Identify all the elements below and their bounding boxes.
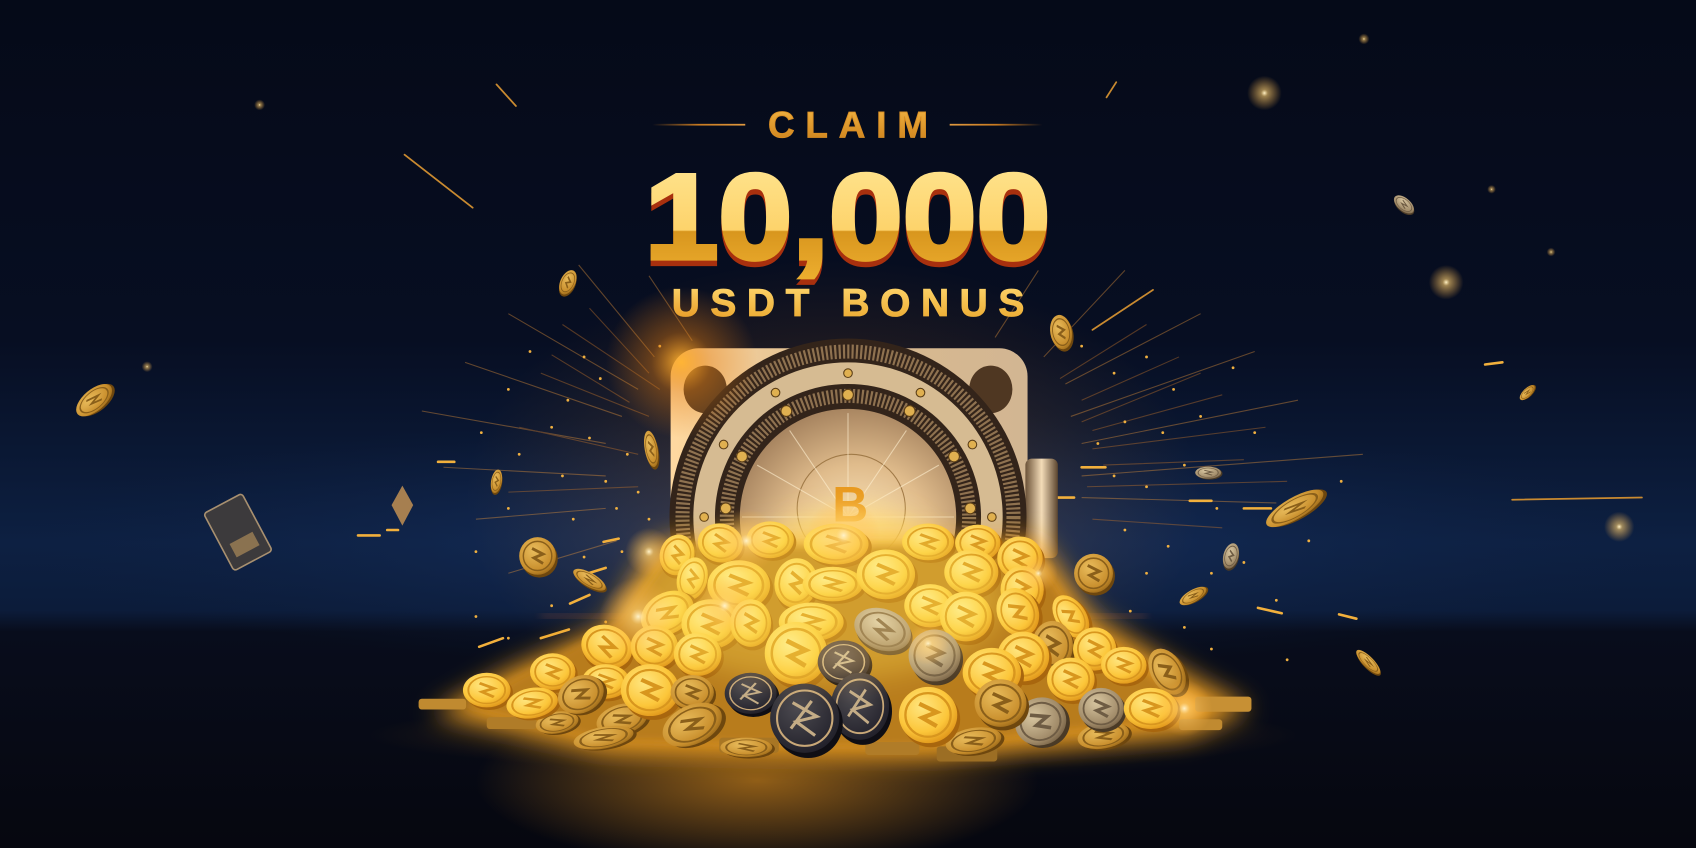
vault safe [606, 287, 1058, 695]
coin: right edge-on [1261, 481, 1332, 535]
scattered gold sparks [476, 346, 1341, 660]
coin: left tiny [489, 469, 504, 496]
coin: upper left [555, 267, 581, 299]
coin: right flat [1195, 467, 1222, 480]
safe top glow [606, 287, 757, 438]
coin: right small [1177, 582, 1211, 610]
back coins [530, 520, 1197, 705]
coin: far left [71, 377, 120, 424]
dial rivets [700, 369, 996, 521]
coin: far lower right [1352, 647, 1385, 679]
title: 10,000 amount: 10,000 [645, 154, 1050, 290]
light burst rays [422, 265, 1363, 573]
coin: near safe left [642, 430, 662, 471]
pile base fill [465, 546, 1179, 746]
pile light overlay [638, 519, 1006, 681]
title: 10,000 amount: 10,000 [645, 149, 1050, 285]
coin: far upper right [1390, 192, 1418, 219]
pile glow [433, 541, 1249, 757]
diamond token [392, 486, 413, 526]
flying coins and tokens [71, 192, 1538, 679]
dial glow [779, 508, 930, 584]
card token [204, 493, 272, 571]
streak accents [358, 82, 1642, 647]
title: claim: CLAIM [768, 104, 928, 145]
title: usdt bonus: USDT BONUS [672, 282, 1024, 325]
coin: lower left small [570, 565, 610, 597]
coin pile [419, 499, 1251, 761]
coin: upper right [1047, 313, 1076, 354]
bitcoin emblem: B [832, 476, 868, 532]
pile sparkles [599, 499, 1213, 737]
coin: lower left [519, 537, 558, 578]
safe body [671, 348, 1028, 619]
coin: right tall [1220, 541, 1242, 573]
coin: far right tiny [1517, 382, 1538, 403]
safe side handle [1025, 459, 1058, 558]
front coins [463, 664, 1181, 761]
distant stars [142, 34, 1634, 542]
safe corner knobs [684, 366, 1012, 413]
coin stacks on floor [419, 697, 1251, 761]
coin: lower right [1074, 554, 1115, 596]
vault dial rings [670, 339, 1026, 695]
